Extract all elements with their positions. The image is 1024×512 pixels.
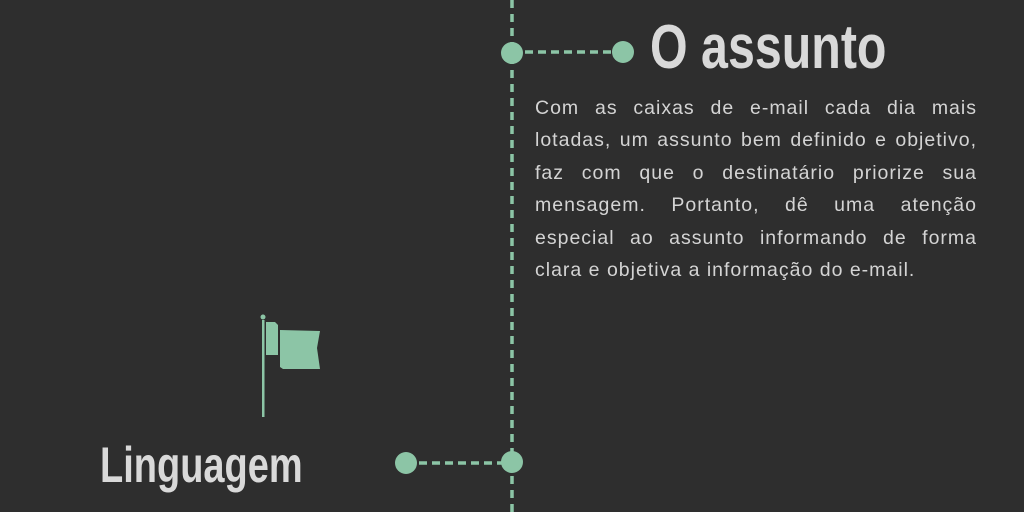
title: Linguagem: Linguagem [100, 437, 303, 493]
text block: assunto description: lotadas, um assunto bem definido e objetivo, [535, 129, 977, 151]
text block: assunto description: faz com que o destinatário priorize sua [535, 162, 977, 184]
text block: assunto description: mensagem. Portanto, dê uma atenção [535, 194, 977, 216]
text block: assunto description: clara e objetiva a informação do e-mail. [535, 259, 915, 281]
text block: assunto description [535, 97, 977, 281]
text block: assunto description: Com as caixas de e-mail cada dia mais [535, 97, 977, 119]
text block: assunto description: especial ao assunto informando de forma [535, 227, 977, 249]
icon: flag [260, 314, 320, 417]
title: O assunto: O assunto [650, 13, 886, 82]
